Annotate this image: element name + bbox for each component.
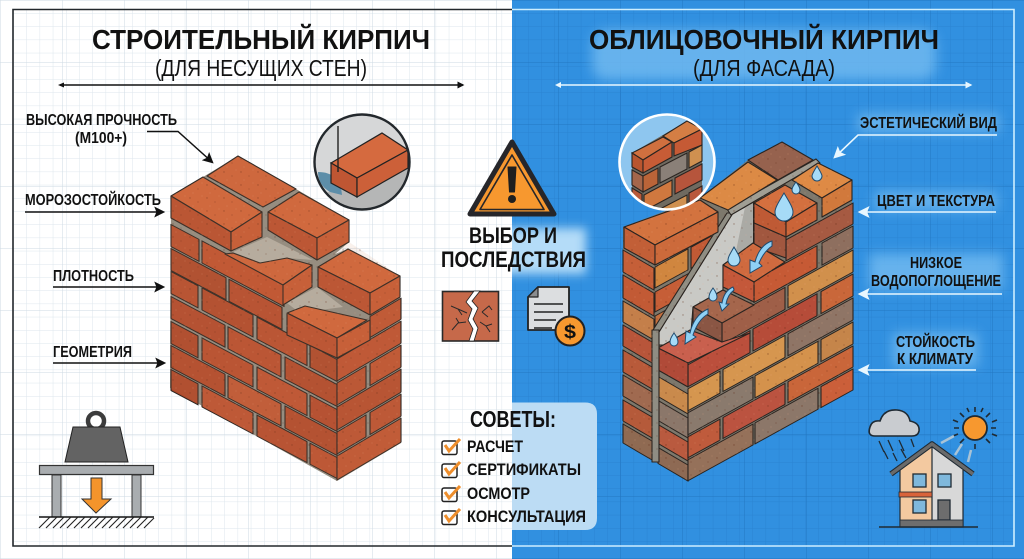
- label: high strength: (М100+): [75, 130, 127, 147]
- arrow head: right dimension start: [555, 82, 561, 88]
- arrow: geometry: [53, 362, 164, 364]
- tip item: consultation: КОНСУЛЬТАЦИЯ: [467, 507, 586, 526]
- frame: left panel: [13, 10, 512, 546]
- background: left white grid: [0, 0, 512, 559]
- inset: facing brick close-up: [620, 114, 714, 225]
- icon: warning triangle: [470, 142, 554, 214]
- heading: choice and consequences: ВЫБОР И: [469, 223, 557, 248]
- heading: left title: (ДЛЯ НЕСУЩИХ СТЕН): [155, 55, 367, 81]
- arrow: aesthetic look: [835, 135, 997, 157]
- label: climate resistance: [896, 332, 975, 368]
- label: climate resistance: К КЛИМАТУ: [897, 351, 974, 368]
- tip item: inspection: ОСМОТР: [467, 484, 530, 503]
- panel: tips background: [512, 402, 597, 530]
- label glow: right labels: [858, 114, 1003, 367]
- heading: choice and consequences: [441, 223, 586, 272]
- icon: house with weather: [869, 407, 997, 527]
- panel: cutaway membrane: [659, 203, 753, 345]
- heading: right title: [589, 23, 939, 81]
- glow behind central heading: [500, 228, 586, 274]
- label: climate resistance: СТОЙКОСТЬ: [896, 332, 975, 351]
- label: high strength: ВЫСОКАЯ ПРОЧНОСТЬ: [26, 112, 177, 129]
- icon: cracked brick: [442, 291, 498, 341]
- label: geometry: ГЕОМЕТРИЯ: [53, 344, 132, 361]
- icon: weight on table: [39, 413, 154, 528]
- label: color and texture: ЦВЕТ И ТЕКСТУРА: [877, 193, 995, 210]
- background: right blue grid: [512, 0, 1024, 559]
- label: frost resistance: МОРОЗОСТОЙКОСТЬ: [25, 190, 161, 209]
- tip item: inspection: [442, 484, 530, 503]
- frame: right panel: [512, 10, 1014, 546]
- tip item: certificates: СЕРТИФИКАТЫ: [467, 460, 581, 479]
- arrow: color and texture: [860, 211, 996, 213]
- heading: right title: ОБЛИЦОВОЧНЫЙ КИРПИЧ: [589, 23, 939, 55]
- heading: left title: СТРОИТЕЛЬНЫЙ КИРПИЧ: [92, 23, 430, 55]
- heading: right title: (ДЛЯ ФАСАДА): [693, 55, 835, 81]
- arrow: density: [53, 286, 163, 288]
- heading: left title: [92, 23, 430, 81]
- arrow: low water absorption: [860, 293, 1002, 295]
- illustration: facing brick wall: [623, 142, 853, 481]
- water drops and arrows: [670, 166, 822, 346]
- arrow: climate resistance: [860, 369, 976, 371]
- tip item: calculation: [442, 437, 524, 456]
- heading glow: right title: [592, 30, 936, 80]
- arrow: right width dimension: [557, 84, 971, 86]
- heading: tips: СОВЕТЫ:: [470, 406, 556, 432]
- label: high strength: [26, 112, 177, 147]
- tip item: calculation: РАСЧЕТ: [467, 437, 524, 456]
- label: density: ПЛОТНОСТЬ: [53, 268, 134, 285]
- arrow head: left dimension start: [58, 82, 64, 88]
- icon: document with coin: [528, 287, 584, 346]
- arrow: high strength: [147, 132, 212, 162]
- icon: document with coin: $: [564, 322, 576, 343]
- arrow: left width dimension: [60, 84, 463, 86]
- heading: choice and consequences: ПОСЛЕДСТВИЯ: [441, 247, 586, 272]
- label: low water absorption: НИЗКОЕ: [910, 255, 962, 272]
- label: low water absorption: [871, 255, 1001, 290]
- panel: tips: [442, 406, 586, 526]
- inset: brick close-up: [313, 113, 411, 211]
- arrow: frost resistance: [25, 211, 163, 213]
- illustration: structural brick wall: [170, 156, 401, 481]
